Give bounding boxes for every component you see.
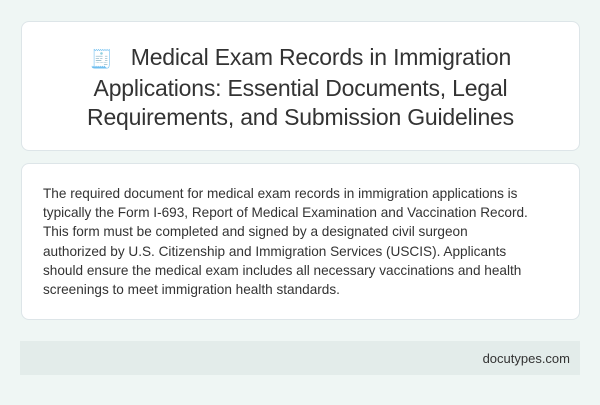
text block: typically the Form I-693, Report of Medical Examination and Vaccination Record. — [43, 205, 528, 220]
text block: This form must be completed and signed by a designated civil surgeon — [43, 224, 468, 239]
text block: authorized by U.S. Citizenship and Immigration Services (USCIS). Applicants — [43, 244, 506, 259]
title: Applications: Essential Documents, Legal — [94, 75, 507, 101]
footer: docutypes.com — [483, 351, 570, 366]
panel: header — [21, 21, 580, 151]
footer — [20, 341, 580, 375]
text block: should ensure the medical exam includes all necessary vaccinations and health — [43, 263, 521, 278]
text block — [43, 186, 528, 297]
text block: screenings to meet immigration health standards. — [43, 282, 340, 297]
panel: description — [21, 163, 580, 320]
title: 🧾 Medical Exam Records in Immigration — [90, 44, 511, 70]
text block: The required document for medical exam records in immigration applications is — [43, 186, 517, 201]
title: Requirements, and Submission Guidelines — [87, 104, 514, 130]
title — [87, 44, 514, 130]
